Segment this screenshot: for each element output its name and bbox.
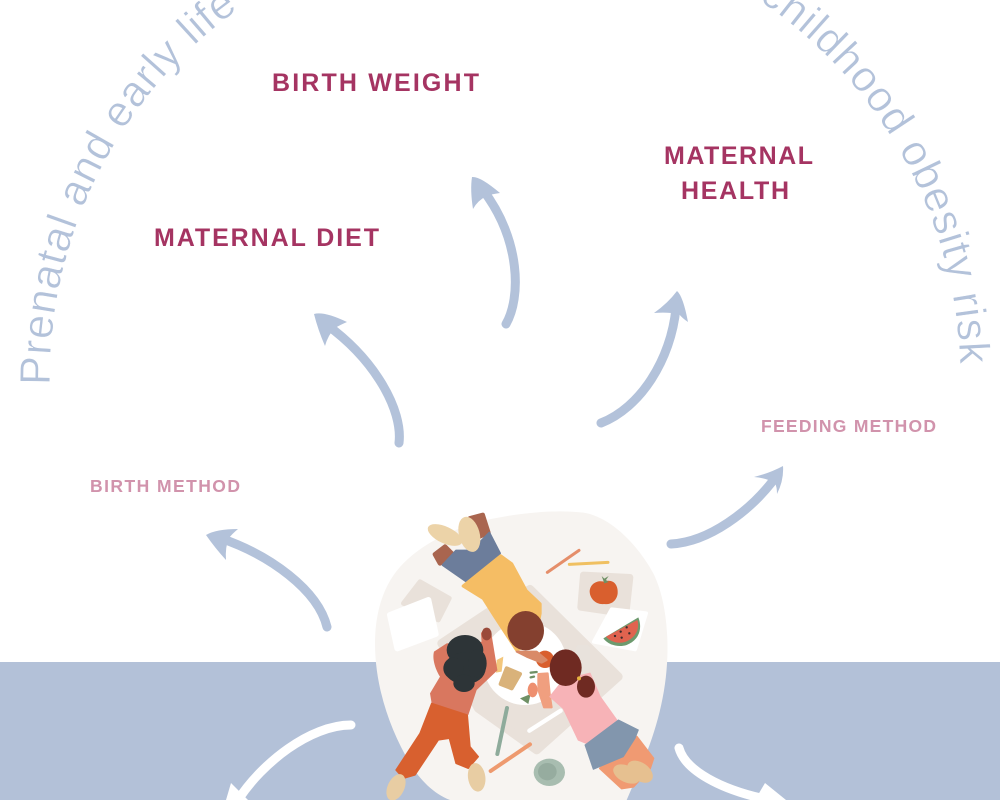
pencils xyxy=(491,550,608,771)
arrow: to maternal health xyxy=(601,291,688,423)
arrow: to birth weight xyxy=(471,177,515,324)
girl with ponytail xyxy=(538,649,657,788)
napkin strip xyxy=(529,711,561,731)
paper sheets xyxy=(390,582,449,648)
heading: maternal diet: MATERNAL DIET xyxy=(154,224,379,252)
food on plate xyxy=(496,651,554,704)
curved title xyxy=(20,0,990,382)
arrow: white lower right xyxy=(679,748,786,800)
heading: maternal health xyxy=(664,142,813,205)
heading: maternal health: MATERNAL xyxy=(664,142,813,170)
plate xyxy=(483,622,567,705)
blanket blob xyxy=(375,511,667,800)
heading: birth weight: BIRTH WEIGHT xyxy=(272,69,479,97)
bowl xyxy=(534,759,565,786)
glass xyxy=(576,645,590,670)
arrow: white lower left xyxy=(226,725,351,800)
placemat xyxy=(442,589,618,750)
tomato card xyxy=(581,575,630,614)
background band xyxy=(0,662,1000,800)
boy xyxy=(425,514,547,663)
arrow: to birth method xyxy=(206,529,327,627)
illustration: children on picnic blanket xyxy=(375,511,667,800)
heading: maternal health: HEALTH xyxy=(681,177,789,205)
label: feeding method: FEEDING METHOD xyxy=(761,416,936,436)
arrow: to feeding method xyxy=(671,466,783,544)
watermelon card xyxy=(594,609,646,649)
label: birth method: BIRTH METHOD xyxy=(90,476,240,496)
arrow: to maternal diet xyxy=(314,313,399,443)
girl with dark hair xyxy=(383,628,496,800)
